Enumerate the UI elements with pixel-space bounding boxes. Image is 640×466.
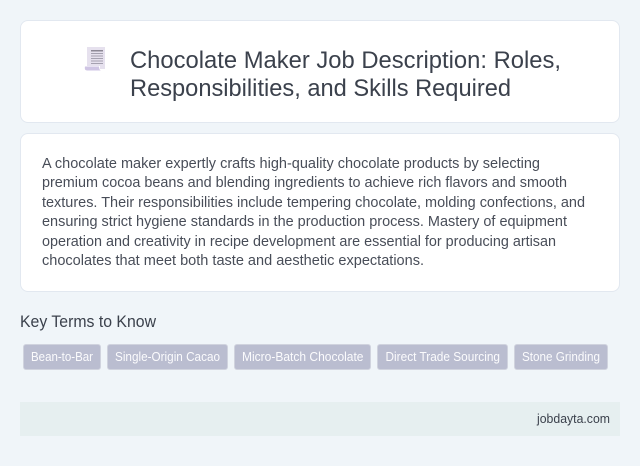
footer source text: jobdayta.com: [536, 412, 610, 426]
title: Chocolate Maker Job Description: Roles,: [130, 47, 561, 74]
icon: paper scroll: [84, 47, 105, 70]
description text: A chocolate maker expertly crafts high-quality chocolate products by selecting: [42, 156, 540, 172]
footer bar: [20, 402, 620, 436]
panel: title card: [20, 20, 620, 122]
description text: ensuring strict hygiene standards in the production process. Mastery of equipment: [42, 214, 567, 230]
description text: chocolates that meet both taste and aesthetic expectations.: [42, 253, 424, 269]
description text: premium cocoa beans and blending ingredients to achieve rich flavors and smooth: [42, 175, 567, 191]
title: Responsibilities, and Skills Required: [130, 75, 511, 102]
title: [130, 47, 561, 102]
description text: [42, 156, 585, 269]
heading: key terms: Key Terms to Know: [20, 313, 156, 331]
tag labels: Bean-to-Bar: [31, 350, 93, 364]
tag labels: Stone Grinding: [522, 350, 600, 364]
tag labels: Micro-Batch Chocolate: [242, 350, 364, 364]
description text: operation and creativity in recipe development are essential for producing artisan: [42, 234, 556, 250]
description text: textures. Their responsibilities include tempering chocolate, molding confections, and: [42, 195, 585, 211]
tag labels: Direct Trade Sourcing: [386, 350, 500, 364]
tag labels: Single-Origin Cacao: [115, 350, 220, 364]
panel: description card: [20, 133, 620, 292]
